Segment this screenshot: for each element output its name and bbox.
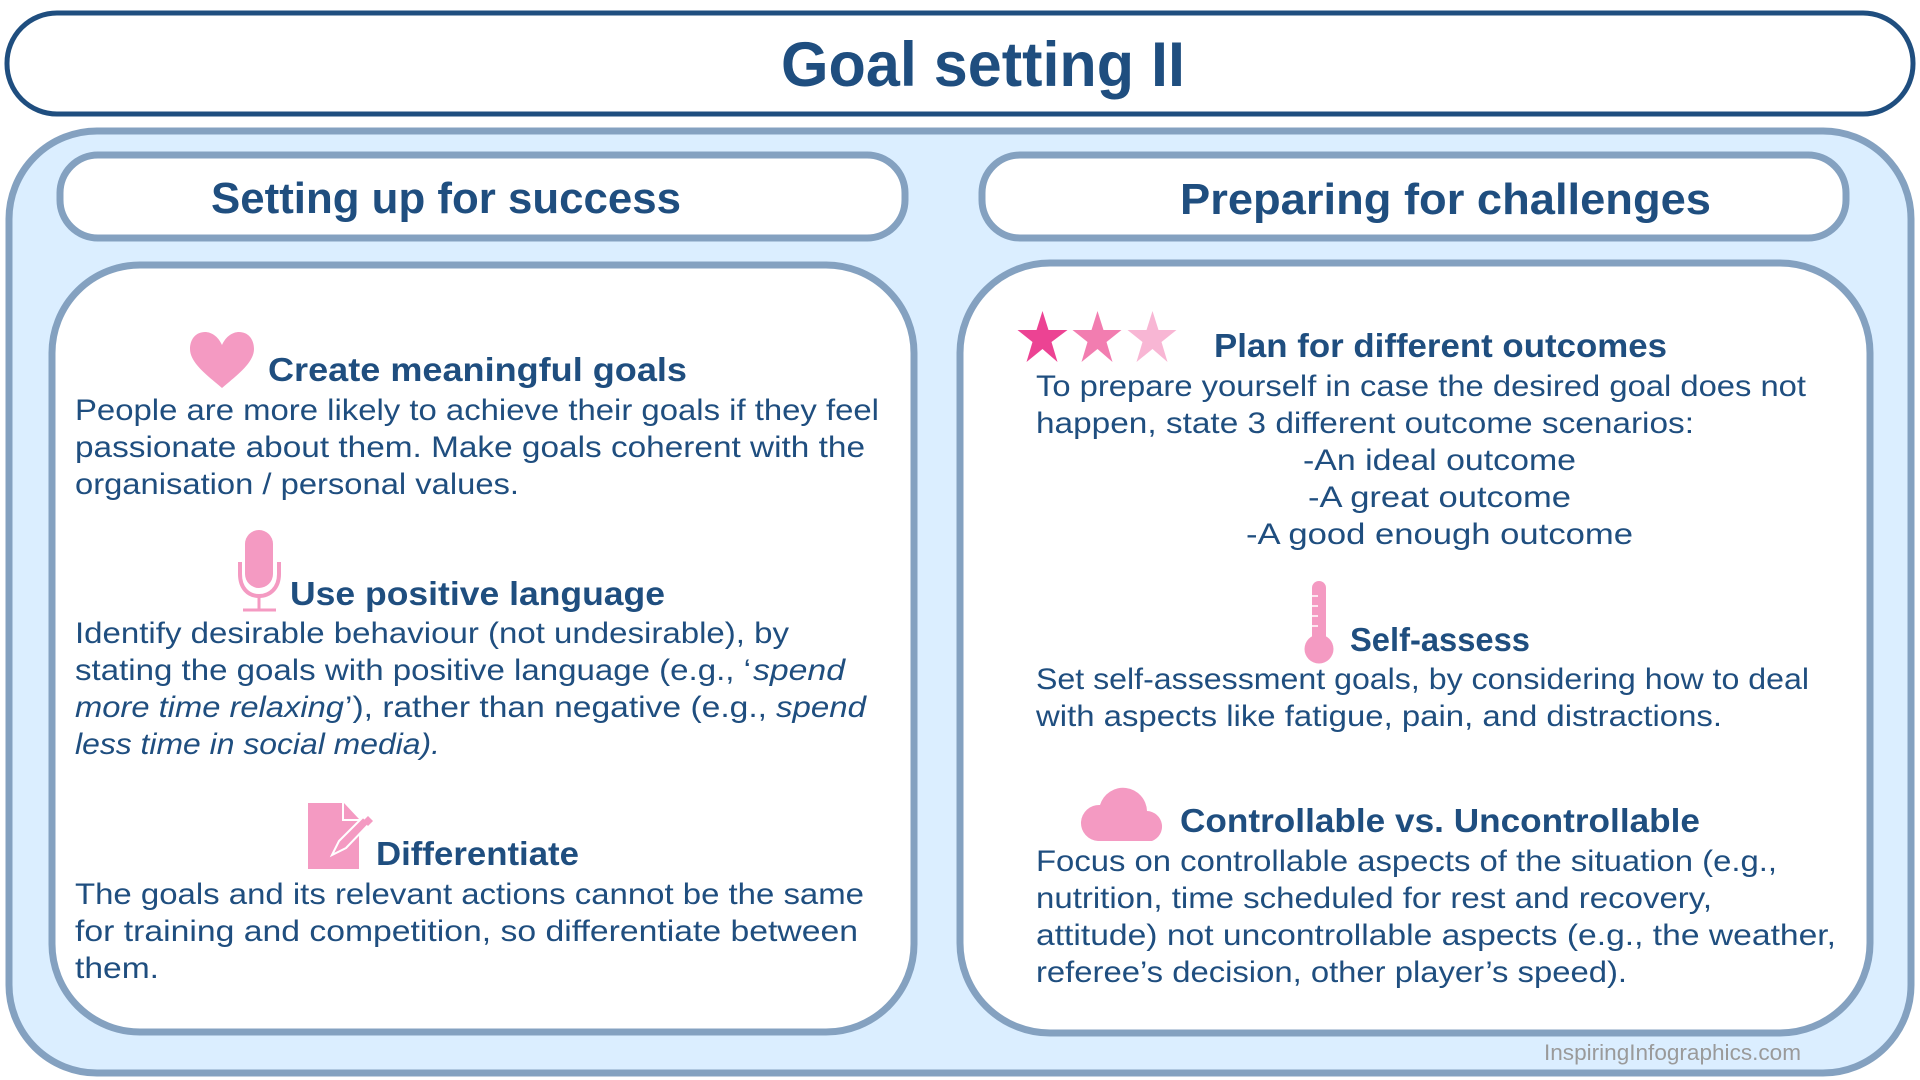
text block: happen, state 3 different outcome scenarios:: [1036, 407, 1694, 440]
icon: heart: [190, 332, 254, 388]
text block: organisation / personal values.: [75, 468, 519, 501]
heading: Self-assess: [1350, 621, 1530, 658]
icon: document with pencil: [308, 803, 373, 869]
text block: Identify desirable behaviour (not undesirable), by: [75, 617, 789, 650]
heading: Create meaningful goals: [268, 351, 687, 388]
text block: less time in social media).: [75, 728, 440, 761]
text block: for training and competition, so differentiate between: [75, 915, 858, 948]
text block: [1036, 845, 1836, 989]
text block: stating the goals with positive language (e.g., ‘: [75, 654, 751, 687]
text block: To prepare yourself in case the desired goal does not: [1036, 370, 1807, 403]
text block: Set self-assessment goals, by considering how to deal: [1036, 663, 1809, 696]
text block: with aspects like fatigue, pain, and distractions.: [1035, 700, 1722, 733]
text block: attitude) not uncontrollable aspects (e.g., the weather,: [1036, 919, 1836, 952]
text block: referee’s decision, other player’s speed).: [1036, 956, 1627, 989]
text block: People are more likely to achieve their goals if they feel: [75, 394, 879, 427]
text block: [75, 394, 879, 501]
text block: -A good enough outcome: [1246, 518, 1633, 551]
text block: Focus on controllable aspects of the situation (e.g.,: [1036, 845, 1777, 878]
heading: Plan for different outcomes: [1214, 327, 1667, 364]
watermark: InspiringInfographics.com: [1544, 1040, 1801, 1065]
title banner: [7, 13, 1913, 114]
text block: -An ideal outcome: [1303, 444, 1576, 477]
text block: more time relaxing: [75, 691, 344, 724]
icon: three stars: [1018, 311, 1176, 362]
icon: thermometer: [1304, 581, 1334, 664]
title banner: Goal setting II: [781, 30, 1185, 100]
text block: [1036, 370, 1807, 551]
text block: [1035, 663, 1809, 733]
heading: preparing for challenges: Preparing for challenges: [1180, 175, 1711, 224]
item: differentiate: [75, 803, 864, 985]
text block: nutrition, time scheduled for rest and recovery,: [1036, 882, 1712, 915]
text block: spend: [753, 654, 846, 687]
text block: [75, 878, 864, 985]
text block: passionate about them. Make goals coherent with the: [75, 431, 865, 464]
panel: preparing for challenges: [960, 263, 1870, 1033]
text block: ’), rather than negative (e.g.,: [345, 691, 767, 724]
panel: setting up for success: [52, 265, 914, 1032]
item: create meaningful goals: [75, 332, 879, 501]
item: use positive language: [75, 530, 867, 761]
item: plan for different outcomes: [1018, 311, 1807, 551]
heading: Controllable vs. Uncontrollable: [1180, 802, 1700, 839]
item: controllable vs. uncontrollable: [1036, 788, 1836, 989]
item: self-assess: [1035, 581, 1809, 733]
heading: preparing for challenges: [982, 155, 1846, 238]
text block: spend: [776, 691, 867, 724]
text block: them.: [75, 952, 159, 985]
heading: Use positive language: [290, 575, 665, 612]
text block: -A great outcome: [1308, 481, 1571, 514]
icon: cloud: [1081, 788, 1162, 841]
text block: [75, 617, 867, 761]
heading: Differentiate: [376, 835, 579, 872]
heading: setting up for success: Setting up for success: [211, 174, 681, 223]
text block: The goals and its relevant actions cannot be the same: [75, 878, 864, 911]
icon: microphone: [240, 530, 279, 610]
heading: setting up for success: [60, 155, 905, 238]
